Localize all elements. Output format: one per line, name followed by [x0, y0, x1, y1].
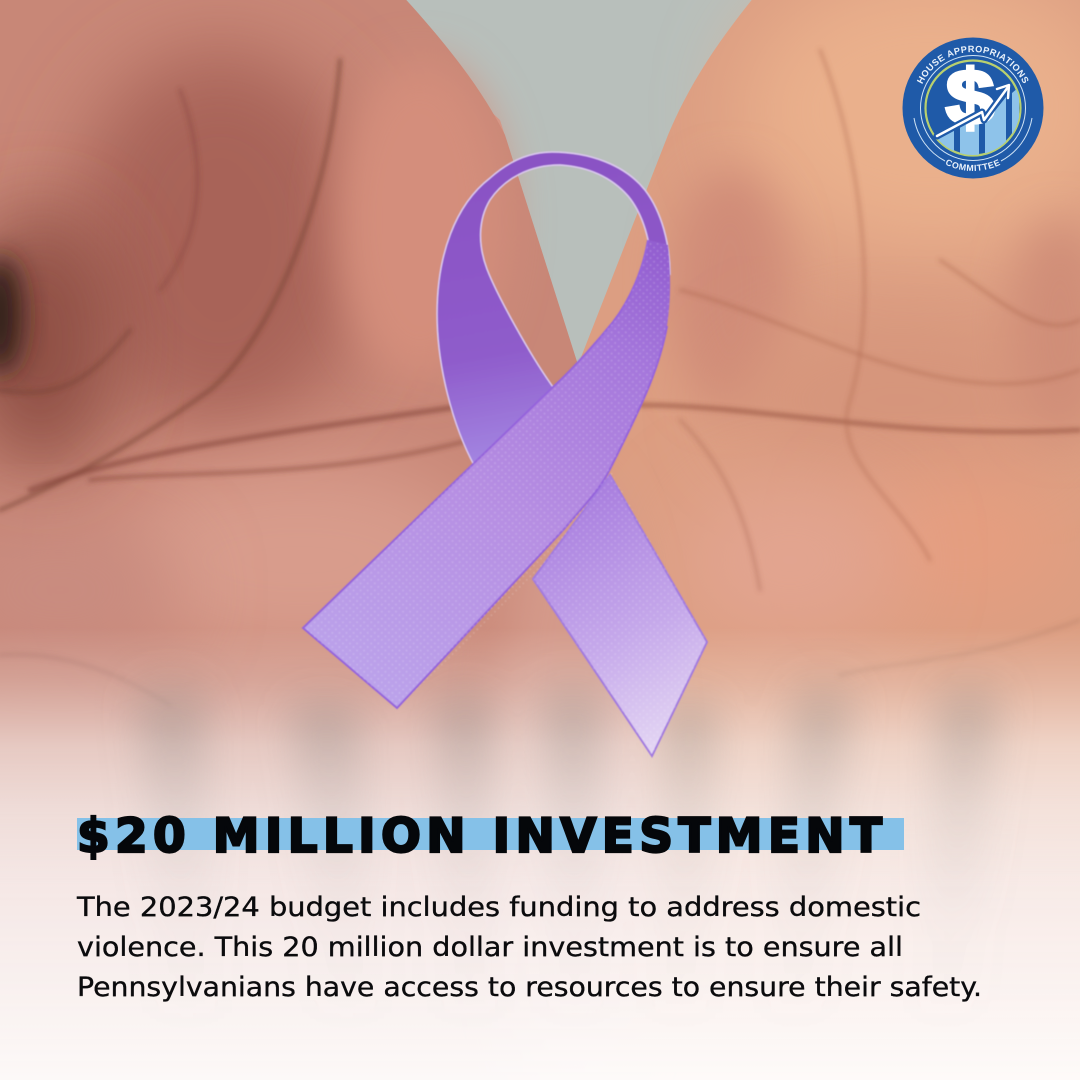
logo lettering: HOUSE APPROPRIATIONS — [916, 46, 1028, 84]
logo chart bars — [938, 90, 1019, 155]
body text: The 2023/24 budget includes funding to address domestic — [76, 892, 921, 923]
body text — [76, 892, 982, 1003]
palm creases — [0, 50, 1080, 705]
heading with blue highlight: $20 MILLION INVESTMENT — [77, 809, 882, 864]
left hand — [0, 0, 590, 1080]
ribbon front strand edges — [303, 240, 667, 708]
logo lettering: COMMITTEE — [946, 159, 1000, 171]
ribbon front strand — [303, 240, 670, 708]
purple awareness ribbon — [303, 152, 707, 756]
grey backdrop between hands — [360, 0, 800, 365]
ribbon weave texture — [303, 240, 707, 756]
right hand — [560, 0, 1080, 1080]
body text: Pennsylvanians have access to resources to ensure their safety. — [77, 972, 982, 1003]
logo arrow — [937, 85, 1009, 136]
ribbon back strand and loop — [437, 152, 670, 467]
palm centre below ribbon — [495, 470, 655, 1080]
finger shadows — [135, 639, 1005, 1000]
logo rings — [914, 56, 1032, 161]
logo lettering — [916, 46, 1028, 171]
ribbon tail — [533, 475, 707, 756]
body text: violence. This 20 million dollar investment is to ensure all — [77, 932, 903, 963]
logo: House Appropriations Committee seal — [902, 38, 1044, 178]
logo dollar sign: $ — [946, 53, 994, 141]
